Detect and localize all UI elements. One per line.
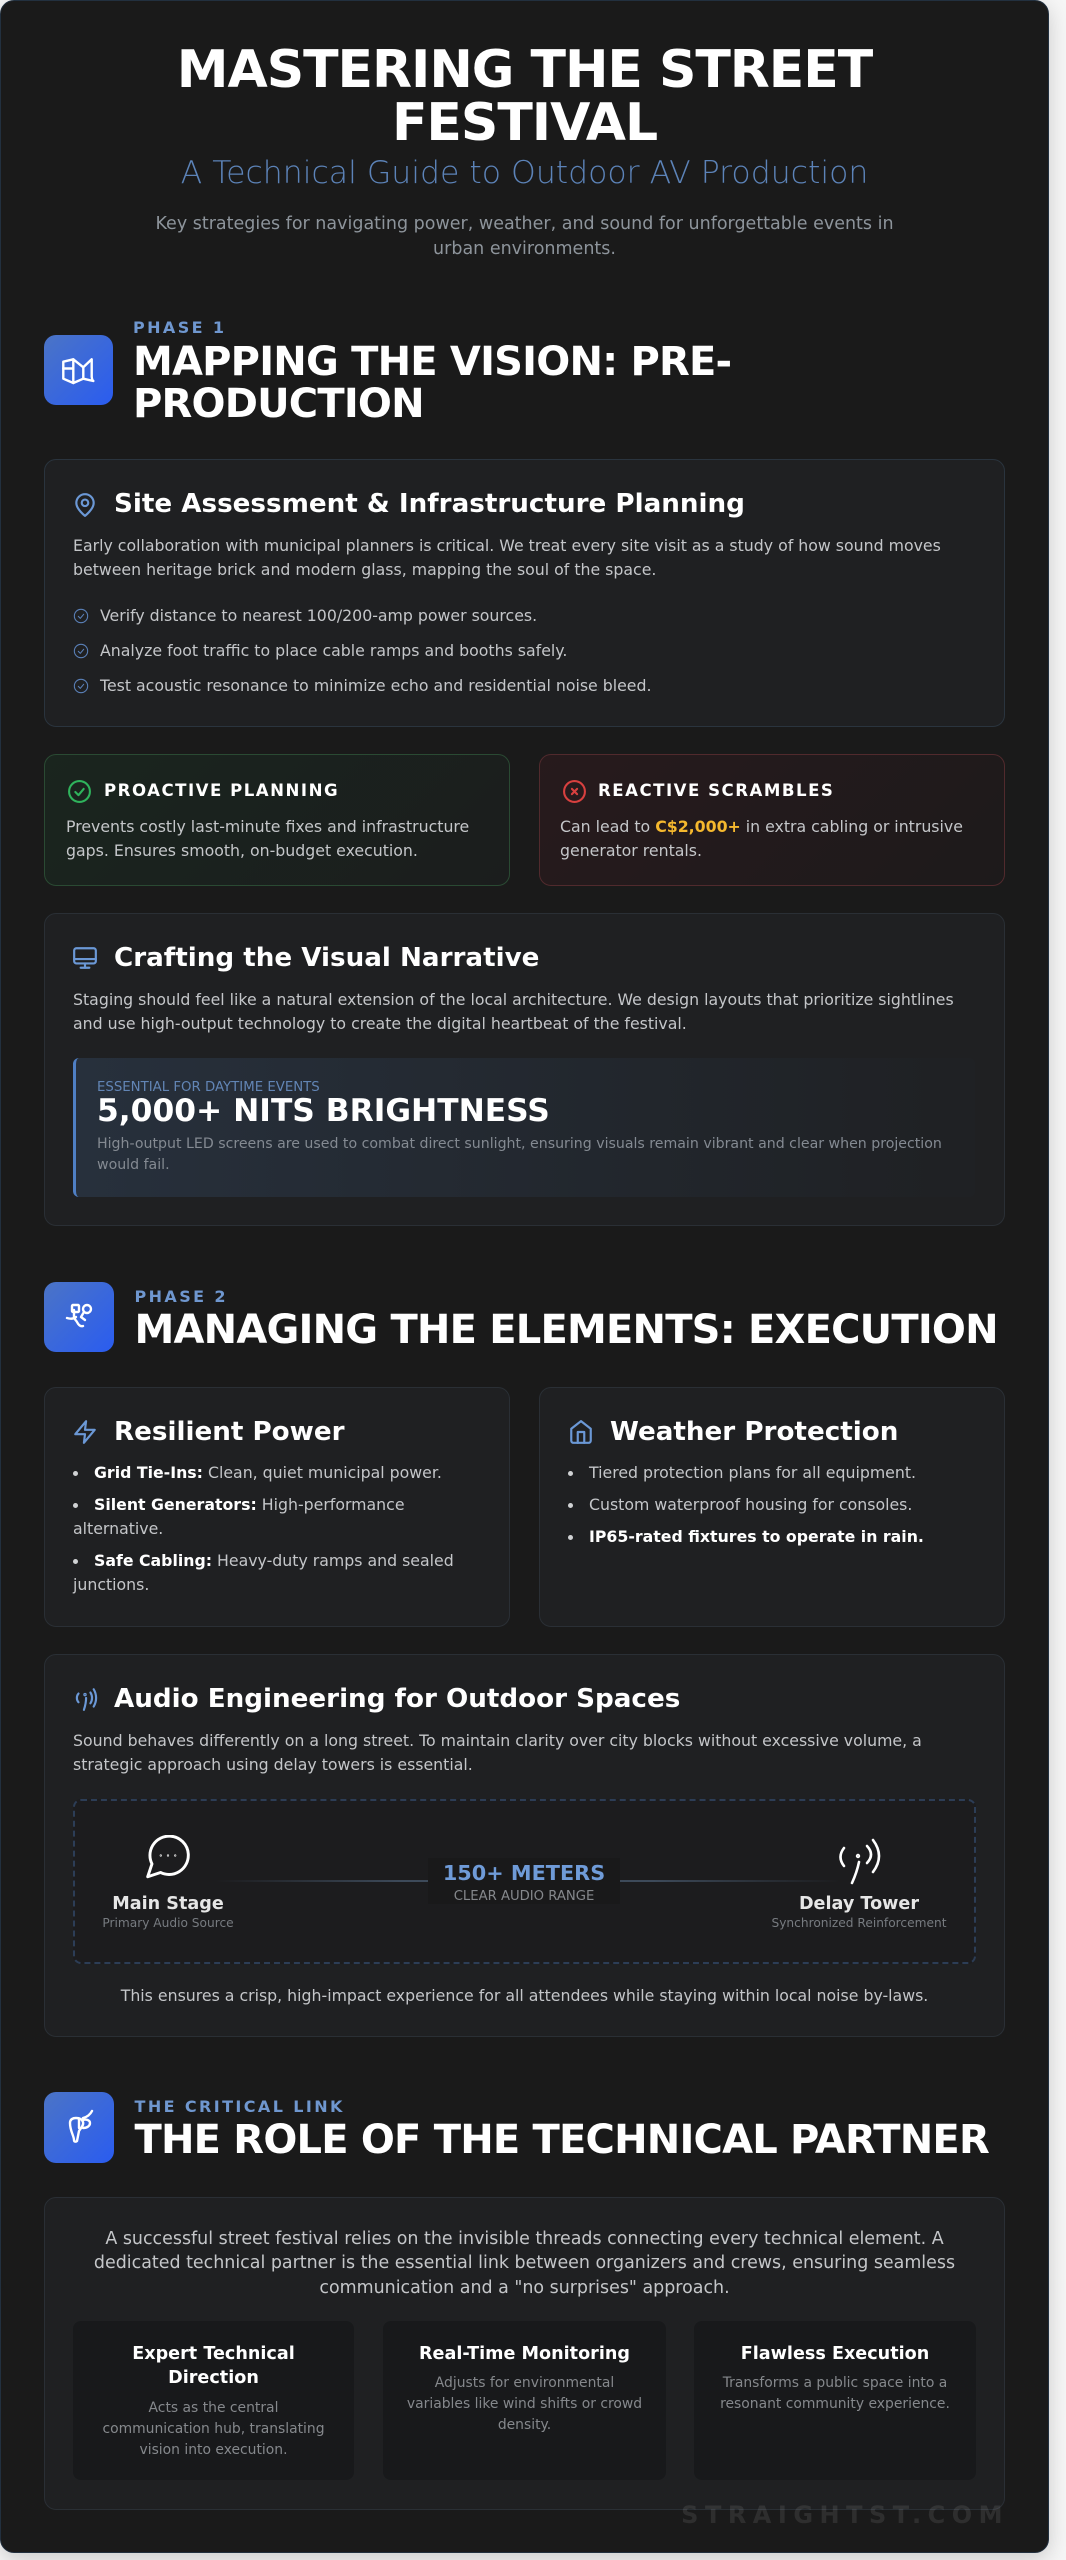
card text: resonant community experience. xyxy=(720,2396,950,2412)
heading: Crafting the Visual Narrative xyxy=(114,943,539,973)
check icon 1 xyxy=(74,608,88,624)
title xyxy=(177,40,873,153)
check icon 2 xyxy=(74,644,88,658)
card text: variables like wind shifts or crowd xyxy=(407,2396,642,2412)
phase 1 header xyxy=(44,335,113,405)
title: FESTIVAL xyxy=(392,93,657,153)
card text xyxy=(560,817,963,860)
callout text xyxy=(97,1136,942,1173)
icon: monitor xyxy=(73,947,97,969)
callout: brightness xyxy=(73,1058,975,1197)
paragraph: Sound behaves differently on a long street. To maintain clarity over city blocks without excessive volume, a xyxy=(73,1731,922,1750)
range caption: CLEAR AUDIO RANGE xyxy=(454,1889,594,1904)
panel: audio engineering xyxy=(44,1654,1005,2037)
card title xyxy=(132,2344,295,2388)
panel: technical partner xyxy=(44,2197,1005,2510)
paragraph xyxy=(73,1731,922,1774)
paragraph: between heritage brick and modern glass, mapping the soul of the space. xyxy=(73,560,656,579)
checklist xyxy=(74,606,652,695)
item 3: Test acoustic resonance to minimize echo and residential noise bleed. xyxy=(100,676,652,695)
paragraph xyxy=(73,990,954,1033)
card title: Real-Time Monitoring xyxy=(419,2344,630,2364)
card text: density. xyxy=(498,2417,551,2433)
phase 2 heading: MANAGING THE ELEMENTS: EXECUTION xyxy=(134,1306,998,1352)
range label xyxy=(428,1858,620,1904)
bullet xyxy=(568,1471,573,1476)
card text: Can lead to C$2,000+ in extra cabling or intrusive xyxy=(560,817,963,836)
heading: Audio Engineering for Outdoor Spaces xyxy=(114,1684,680,1714)
item: cabling: Safe Cabling: Heavy-duty ramps and sealed xyxy=(94,1551,454,1570)
bullet xyxy=(568,1503,573,1508)
card text xyxy=(720,2375,950,2412)
panel: resilient power xyxy=(44,1387,510,1627)
phase 3 kicker: THE CRITICAL LINK xyxy=(134,2097,345,2116)
item: cabling xyxy=(72,1551,454,1594)
icon: x circle xyxy=(563,780,586,803)
paragraph: Staging should feel like a natural extension of the local architecture. We design layouts that prioritize sightlines xyxy=(73,990,954,1009)
phase 1 heading: PRODUCTION xyxy=(133,381,424,427)
item 1: Verify distance to nearest 100/200-amp power sources. xyxy=(100,606,537,625)
item: cabling: junctions. xyxy=(73,1575,149,1594)
item: generators: alternative. xyxy=(73,1519,163,1538)
range line xyxy=(215,1880,840,1882)
phase 1 icon: map xyxy=(44,335,113,405)
phase 2 header xyxy=(44,1282,114,1352)
panel: proactive planning xyxy=(44,754,510,886)
partner paragraph: communication and a "no surprises" approach. xyxy=(319,2278,730,2298)
range value: 150+ METERS xyxy=(443,1861,605,1885)
icon: house xyxy=(570,1420,592,1444)
item: generators: Silent Generators: High-performance xyxy=(94,1495,405,1514)
delay tower sublabel: Synchronized Reinforcement xyxy=(771,1916,946,1930)
panel: visual narrative xyxy=(44,913,1005,1226)
icon: radio xyxy=(76,1688,98,1711)
card text xyxy=(102,2400,325,2458)
card text: communication hub, translating xyxy=(102,2421,325,2437)
item: plans: Tiered protection plans for all equipment. xyxy=(589,1463,916,1482)
card text xyxy=(407,2375,642,2433)
partner paragraph xyxy=(94,2229,955,2298)
card: expert direction xyxy=(73,2321,354,2480)
bullet xyxy=(73,1503,78,1508)
callout stat: 5,000+ NITS BRIGHTNESS xyxy=(97,1093,550,1129)
watermark: STRAIGHTST.COM xyxy=(681,2501,1009,2529)
card text: Acts as the central xyxy=(149,2400,278,2416)
icon: bolt xyxy=(74,1420,96,1444)
item: generators xyxy=(73,1495,405,1538)
bullet xyxy=(568,1535,573,1540)
phase 3 header xyxy=(44,2092,114,2163)
icon: check circle xyxy=(68,780,91,803)
main stage label: Main Stage xyxy=(112,1894,224,1914)
callout kicker: ESSENTIAL FOR DAYTIME EVENTS xyxy=(97,1080,320,1095)
item: fixtures: IP65-rated fixtures to operate in rain. xyxy=(589,1527,924,1546)
panel: reactive scrambles xyxy=(539,754,1005,886)
card title: Direction xyxy=(168,2368,259,2388)
phase 2 icon: cable xyxy=(44,1282,114,1352)
callout text: would fail. xyxy=(97,1157,170,1173)
item: housing: Custom waterproof housing for consoles. xyxy=(589,1495,912,1514)
phase 1 heading: MAPPING THE VISION: PRE- xyxy=(133,339,731,385)
phase 1 kicker: PHASE 1 xyxy=(133,318,226,337)
card text: Adjusts for environmental xyxy=(435,2375,614,2391)
card text xyxy=(66,817,469,860)
bullet xyxy=(73,1559,78,1564)
main stage sublabel: Primary Audio Source xyxy=(102,1916,234,1930)
paragraph: Early collaboration with municipal planners is critical. We treat every site visit as a study of how sound moves xyxy=(73,536,941,555)
card title: Flawless Execution xyxy=(741,2344,929,2364)
icon: main stage bubble xyxy=(146,1835,190,1878)
power list xyxy=(72,1463,454,1594)
weather list xyxy=(568,1463,924,1546)
heading: Site Assessment & Infrastructure Planning xyxy=(114,489,745,519)
card title: PROACTIVE PLANNING xyxy=(104,781,339,800)
heading: Weather Protection xyxy=(610,1417,898,1447)
check icon 3 xyxy=(74,678,88,694)
card text: gaps. Ensures smooth, on-budget execution. xyxy=(66,841,418,860)
card: monitoring xyxy=(383,2321,666,2480)
bullet xyxy=(73,1471,78,1476)
card text: Transforms a public space into a xyxy=(723,2375,947,2391)
card text: Prevents costly last-minute fixes and infrastructure xyxy=(66,817,469,836)
icon: delay tower xyxy=(839,1838,880,1884)
heading: Resilient Power xyxy=(114,1417,345,1447)
partner paragraph: A successful street festival relies on the invisible threads connecting every technical element. A xyxy=(105,2229,944,2249)
card: execution xyxy=(694,2321,976,2480)
phase 3 heading: THE ROLE OF THE TECHNICAL PARTNER xyxy=(134,2117,989,2163)
callout text: High-output LED screens are used to combat direct sunlight, ensuring visuals remain vibrant and clear when projection xyxy=(97,1136,942,1152)
intro text: Key strategies for navigating power, weather, and sound for unforgettable events in xyxy=(155,214,894,234)
phase 2 kicker: PHASE 2 xyxy=(134,1287,228,1306)
subtitle: A Technical Guide to Outdoor AV Production xyxy=(181,155,868,191)
phase 3 icon: handshake xyxy=(44,2092,114,2163)
panel: weather protection xyxy=(539,1387,1005,1627)
icon: map pin xyxy=(75,493,95,517)
card title: REACTIVE SCRAMBLES xyxy=(598,781,834,800)
phase 1 heading xyxy=(133,339,731,427)
delay tower label: Delay Tower xyxy=(799,1894,919,1914)
closing note: This ensures a crisp, high-impact experience for all attendees while staying within local noise by-laws. xyxy=(121,1986,928,2005)
paragraph: and use high-output technology to create the digital heartbeat of the festival. xyxy=(73,1014,687,1033)
paragraph: strategic approach using delay towers is essential. xyxy=(73,1755,473,1774)
title: MASTERING THE STREET xyxy=(177,40,872,100)
item 2: Analyze foot traffic to place cable ramps and booths safely. xyxy=(100,641,567,660)
card title: Expert Technical xyxy=(132,2344,295,2364)
intro text xyxy=(155,214,894,258)
intro text: urban environments. xyxy=(433,238,616,258)
card text: vision into execution. xyxy=(139,2442,288,2458)
item: grid: Grid Tie-Ins: Clean, quiet municipal power. xyxy=(94,1463,442,1482)
partner paragraph: dedicated technical partner is the essential link between organizers and crews, ensuring seamless xyxy=(94,2253,955,2273)
card text: generator rentals. xyxy=(560,841,702,860)
paragraph xyxy=(73,536,941,579)
panel: site assessment xyxy=(44,459,1005,727)
audio diagram xyxy=(73,1799,976,1964)
